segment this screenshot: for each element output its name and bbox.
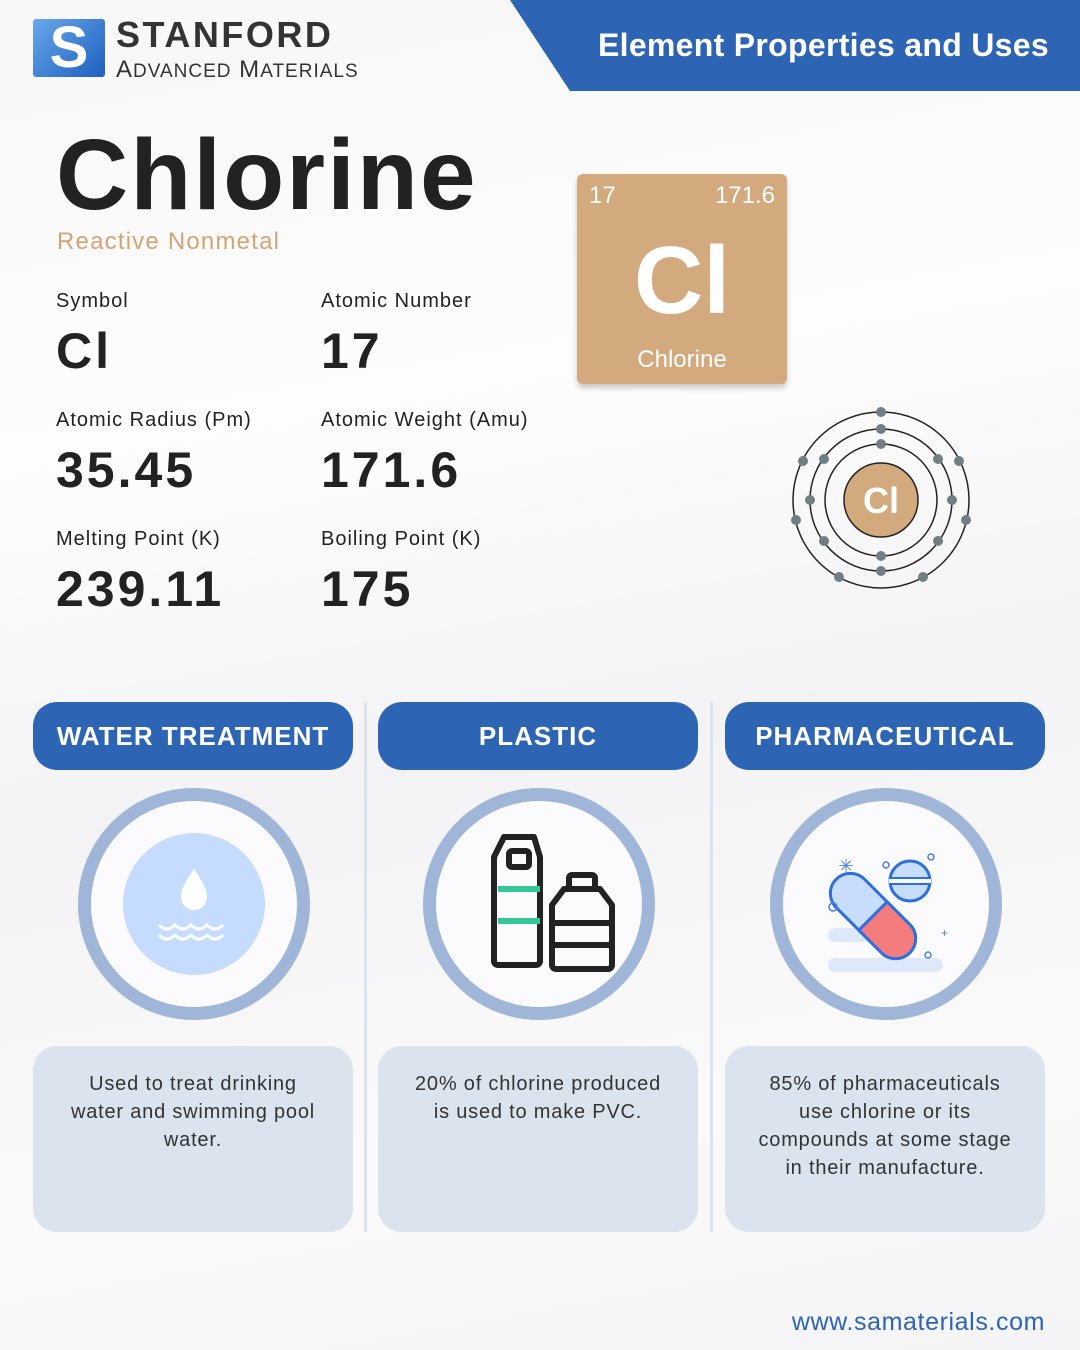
subtitle: Reactive Nonmetal	[57, 228, 280, 255]
properties grid: 171.6	[321, 442, 461, 498]
text: 20% of chlorine produced	[415, 1073, 661, 1095]
icon: pills	[770, 788, 1002, 1020]
panel: plastic	[378, 702, 698, 1232]
properties grid: 17	[321, 323, 383, 379]
footer url: www.samaterials.com	[792, 1308, 1045, 1336]
text: 85% of pharmaceuticals	[769, 1073, 1001, 1095]
icon: bottles	[423, 788, 655, 1020]
header banner	[510, 0, 1080, 91]
properties grid: Atomic Weight (Amu)	[321, 409, 529, 431]
text: compounds at some stage	[758, 1129, 1011, 1151]
icon: S logo: S	[50, 15, 88, 80]
element tile	[577, 174, 787, 384]
text: Used to treat drinking	[89, 1073, 297, 1095]
title: Chlorine	[56, 119, 478, 231]
heading: PHARMACEUTICAL	[755, 721, 1015, 751]
panel: water treatment	[33, 702, 353, 1232]
icon: water drop	[78, 788, 310, 1020]
properties grid: Atomic Number	[321, 290, 472, 312]
properties grid: 175	[321, 561, 413, 617]
properties grid: Atomic Radius (Pm)	[56, 409, 252, 431]
atom diagram: Cl	[863, 480, 899, 521]
heading	[725, 702, 1045, 770]
element tile: 17	[589, 182, 616, 209]
logo: ADVANCED MATERIALS	[116, 56, 359, 83]
logo text: STANFORD	[116, 14, 333, 55]
properties grid	[56, 290, 529, 617]
panel: pharmaceutical	[725, 702, 1045, 1232]
text: use chlorine or its	[799, 1101, 971, 1123]
logo	[33, 14, 359, 83]
text	[33, 1046, 353, 1232]
element tile: Chlorine	[637, 346, 727, 373]
element tile: 171.6	[715, 182, 775, 209]
text: in their manufacture.	[785, 1157, 985, 1179]
text	[725, 1046, 1045, 1232]
properties grid: 35.45	[56, 442, 196, 498]
text: water and swimming pool	[71, 1101, 315, 1123]
atom diagram	[791, 407, 971, 589]
icon: pills: ✳	[838, 856, 854, 876]
text: is used to make PVC.	[434, 1101, 642, 1123]
heading: PLASTIC	[479, 721, 597, 751]
icon: S logo	[33, 19, 105, 77]
properties grid: Melting Point (K)	[56, 528, 221, 550]
heading	[378, 702, 698, 770]
properties grid: Cl	[56, 323, 112, 379]
text	[378, 1046, 698, 1232]
icon: pills: +	[941, 926, 948, 940]
element tile: Cl	[634, 227, 730, 334]
properties grid: 239.11	[56, 561, 224, 617]
heading: WATER TREATMENT	[57, 721, 329, 751]
header banner: Element Properties and Uses	[598, 27, 1049, 63]
heading	[33, 702, 353, 770]
properties grid: Symbol	[56, 290, 129, 312]
properties grid: Boiling Point (K)	[321, 528, 481, 550]
text: water.	[164, 1129, 222, 1151]
